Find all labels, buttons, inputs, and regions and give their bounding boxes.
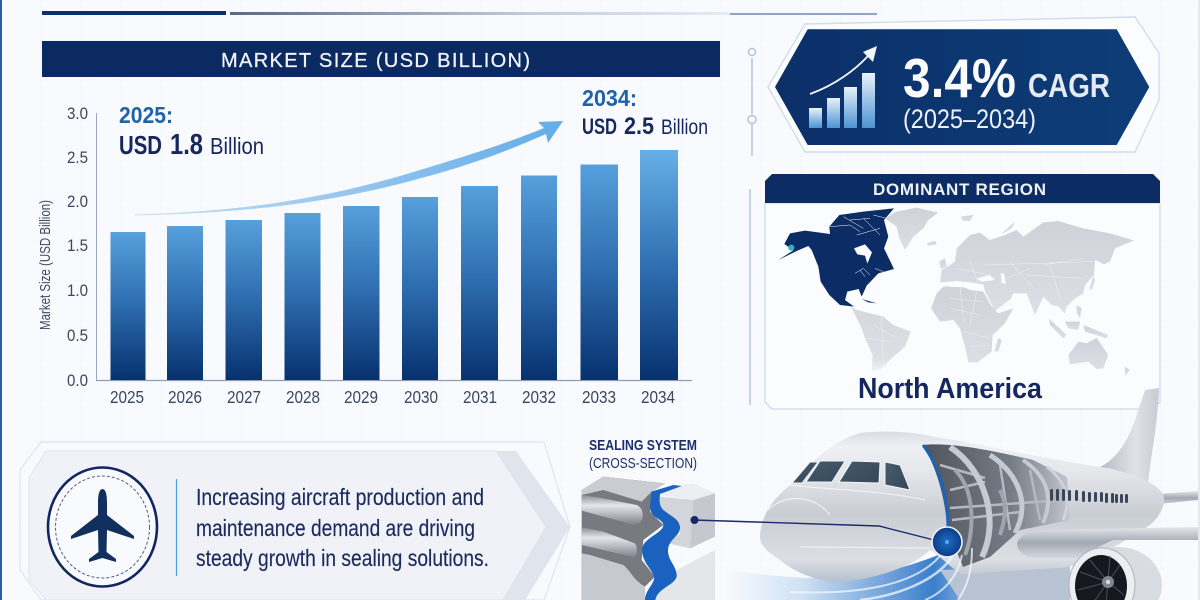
bar chart xyxy=(38,104,692,407)
top rule xyxy=(42,11,877,15)
icon: rising bars xyxy=(809,46,877,128)
x axis labels xyxy=(110,387,675,407)
x axis labels: 2030 xyxy=(404,387,438,407)
under-fuselage xyxy=(940,566,1070,600)
callout: 2034: 2.5 xyxy=(624,113,654,140)
label: sealing system: (CROSS-SECTION) xyxy=(589,455,697,472)
x axis labels: 2033 xyxy=(582,387,616,407)
y axis title: Market Size (USD Billion) xyxy=(38,200,54,330)
nose seams xyxy=(768,485,930,548)
y axis: 1.0 xyxy=(67,281,88,300)
callout: 2025: USD xyxy=(119,130,162,160)
callout: 2025: Billion xyxy=(210,133,264,159)
driver text: steady growth in sealing solutions. xyxy=(196,545,489,571)
map: water bodies xyxy=(950,273,1006,288)
map: Arctic inlets xyxy=(830,215,887,277)
map: North America highlighted xyxy=(778,208,894,307)
callout: 2034: Billion xyxy=(661,116,708,139)
stabilizer xyxy=(1146,491,1198,505)
cockpit windows xyxy=(792,461,910,490)
bars xyxy=(110,150,678,380)
map: other regions xyxy=(852,208,1134,376)
y axis: 0.5 xyxy=(67,326,88,345)
world map xyxy=(778,208,1134,376)
region name: North America xyxy=(858,373,1043,405)
airplane xyxy=(690,388,1198,600)
callout: 2034: 2034: xyxy=(582,85,637,111)
y axis: 3.0 xyxy=(67,104,88,123)
callout: 2025: 2025: xyxy=(119,102,173,128)
callout: 2034: USD xyxy=(582,114,617,139)
CAGR value: 3.4% xyxy=(903,47,1016,109)
map: marker xyxy=(788,245,794,251)
y axis: 1.5 xyxy=(67,236,88,255)
growth arrow xyxy=(135,121,563,216)
x axis labels: 2025 xyxy=(110,387,144,407)
airflow streaks xyxy=(790,548,972,600)
tail xyxy=(1100,388,1159,482)
x axis labels: 2028 xyxy=(286,387,320,407)
icon: airplane badge xyxy=(48,468,157,586)
callout: 2025 xyxy=(119,102,264,161)
map: country borders xyxy=(865,258,1093,365)
x axis labels: 2027 xyxy=(227,387,261,407)
heading: market size xyxy=(42,41,720,77)
x axis labels: 2031 xyxy=(463,387,497,407)
y axis xyxy=(67,104,692,390)
panel: key driver xyxy=(20,442,570,600)
panel: dominant region: DOMINANT REGION xyxy=(873,180,1046,199)
x axis labels: 2026 xyxy=(168,387,202,407)
x axis labels: 2029 xyxy=(344,387,378,407)
y axis: 0.0 xyxy=(67,371,88,390)
wing xyxy=(1017,527,1198,558)
airflow base xyxy=(725,545,985,600)
fuselage xyxy=(760,432,1164,582)
x axis labels: 2034 xyxy=(641,387,675,407)
panel: CAGR xyxy=(768,17,1159,152)
portholes xyxy=(1050,489,1128,503)
lower right block xyxy=(655,550,715,600)
seal cross-section xyxy=(582,477,715,600)
blue seal xyxy=(642,485,682,600)
callout: 2034 xyxy=(582,85,708,140)
x axis labels: 2032 xyxy=(522,387,556,407)
callout: 2025: 1.8 xyxy=(170,129,203,161)
label: sealing system: SEALING SYSTEM xyxy=(589,437,697,454)
driver text: maintenance demand are driving xyxy=(196,515,475,541)
heading: market size: MARKET SIZE (USD BILLION) xyxy=(221,50,530,72)
y axis: 2.5 xyxy=(67,148,88,167)
right block xyxy=(660,483,715,500)
left block xyxy=(582,477,665,600)
seal detail callout xyxy=(932,527,962,557)
cutaway structure xyxy=(923,444,1070,567)
panel: dominant region xyxy=(765,174,1160,409)
leader line xyxy=(690,516,934,540)
y axis: 2.0 xyxy=(67,192,88,211)
panel: CAGR: CAGR xyxy=(1028,67,1110,104)
CAGR period: (2025–2034) xyxy=(903,104,1036,134)
label: sealing system xyxy=(589,437,697,472)
engine xyxy=(1069,547,1162,600)
driver text: Increasing aircraft production and xyxy=(196,484,484,510)
side connector xyxy=(748,48,756,405)
driver text xyxy=(196,484,489,571)
divider xyxy=(176,479,178,576)
